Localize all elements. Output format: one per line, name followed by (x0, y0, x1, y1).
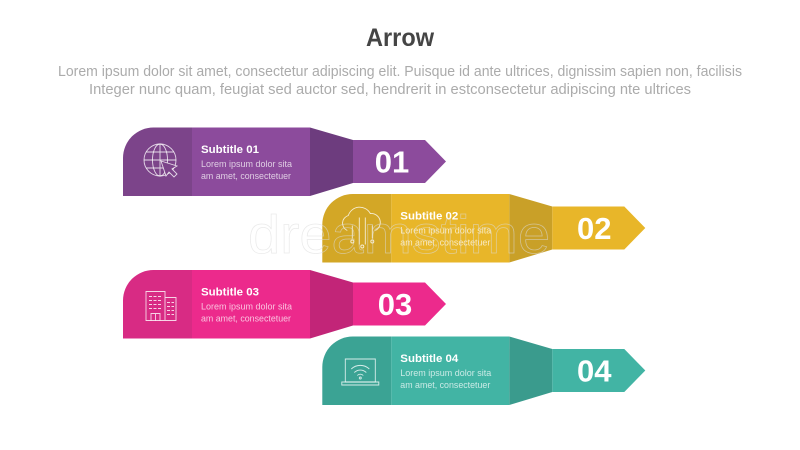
description text (58, 63, 742, 98)
step 02: yellow arrow (322, 194, 645, 262)
body text 01: am amet, consectetuer (201, 171, 291, 182)
body text 02: Lorem ipsum dolor sita (400, 226, 492, 236)
number 03: 03 (378, 287, 412, 322)
icon: cloud network (343, 207, 380, 248)
step 03: pink arrow (123, 270, 446, 338)
body text 01: Lorem ipsum dolor sita (201, 159, 293, 170)
body text 03: Lorem ipsum dolor sita (201, 302, 293, 312)
body text 04: am amet, consectetuer (400, 380, 490, 391)
number 04: 04 (577, 354, 612, 388)
subtitle 04: Subtitle 04 (400, 353, 459, 365)
subtitle 01: Subtitle 01 (201, 144, 259, 156)
icon: globe with cursor (144, 144, 177, 177)
description text: Lorem ipsum dolor sit amet, consectetur adipiscing elit. Puisque id ante ultrices, dignissim sapien non, facilisis (58, 63, 742, 80)
body text 02: am amet, consectetuer (400, 238, 490, 248)
number 01: 01 (375, 144, 409, 180)
watermark: dreamstime (248, 205, 550, 265)
subtitle 02: Subtitle 02 (400, 210, 458, 222)
icon: laptop with wifi (342, 359, 379, 385)
number 02: 02 (577, 211, 612, 246)
subtitle 03: Subtitle 03 (201, 286, 259, 298)
title: Arrow (366, 24, 435, 52)
body text 03: am amet, consectetuer (201, 314, 291, 324)
icon: office buildings (146, 292, 176, 320)
body text 04: Lorem ipsum dolor sita (400, 368, 492, 379)
description text: Integer nunc quam, feugiat sed auctor sed, hendrerit in estconsectetur adipiscing nte ultrices (89, 81, 691, 98)
step 04: teal arrow (322, 336, 645, 405)
step 01: purple arrow (123, 128, 446, 196)
